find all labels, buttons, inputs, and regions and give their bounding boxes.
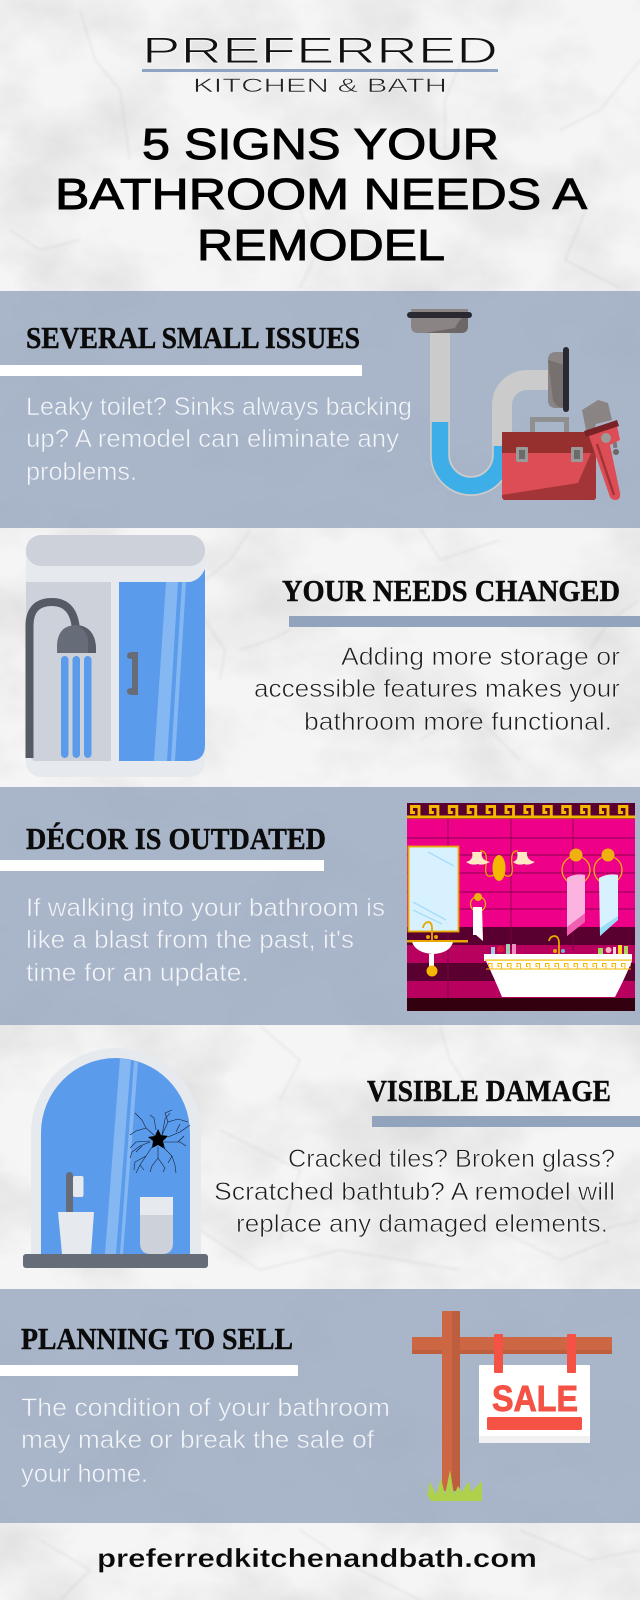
body text: The condition of your bathroom	[21, 1394, 390, 1422]
tile lines	[407, 819, 635, 927]
bottles	[491, 944, 628, 954]
top cap	[26, 535, 205, 566]
cabin frame	[26, 535, 205, 777]
icon: outdated bathroom scene	[407, 803, 635, 1011]
grass	[418, 1470, 482, 1501]
reflections	[105, 1058, 138, 1254]
body text: If walking into your bathroom is	[26, 894, 385, 922]
toolbox	[502, 432, 596, 500]
logo wordmark: PREFERRED	[142, 30, 498, 71]
body text: Scratched bathtub? A remodel will	[214, 1178, 615, 1206]
cup	[58, 1212, 94, 1254]
crossbar	[412, 1337, 612, 1354]
mirror	[408, 846, 458, 932]
blue towel	[599, 874, 618, 936]
heading: DÉCOR IS OUTDATED	[26, 821, 326, 856]
right drain	[548, 352, 565, 408]
door reflections	[154, 582, 186, 761]
glass	[41, 1058, 190, 1254]
sink faucet	[423, 922, 432, 940]
back panel	[26, 582, 111, 761]
body text: your home.	[21, 1460, 148, 1488]
shower pipe	[30, 602, 76, 758]
body text	[26, 894, 385, 987]
sign underline	[487, 1417, 582, 1430]
section 4 text	[214, 1073, 640, 1238]
door handle	[127, 652, 138, 695]
greek key frieze	[407, 803, 635, 819]
panel: planning to sell band	[0, 1289, 640, 1523]
title: REMODEL	[197, 221, 445, 270]
water streams	[61, 656, 92, 758]
title: 5 SIGNS YOUR	[142, 120, 499, 169]
left drain	[411, 309, 468, 333]
section 1 text	[0, 320, 412, 486]
icon: cracked window	[23, 1048, 208, 1268]
body text: accessible features makes your	[254, 675, 620, 703]
toothbrush	[66, 1172, 84, 1214]
body text	[21, 1394, 390, 1488]
tub faucet	[549, 936, 559, 954]
large towel rings	[470, 856, 622, 912]
wall	[407, 803, 635, 1011]
title: BATHROOM NEEDS A	[55, 170, 588, 219]
body text: up? A remodel can eliminate any	[26, 425, 400, 453]
body text	[254, 643, 620, 736]
sign straps	[494, 1334, 503, 1373]
section 5 text	[0, 1321, 390, 1488]
icon: shower cabin	[26, 535, 205, 777]
body text: may make or break the sale of	[21, 1426, 374, 1454]
panel: several small issues band	[0, 291, 640, 528]
body text: bathroom more functional.	[304, 708, 612, 736]
section 3 text	[0, 821, 385, 987]
pipe	[440, 333, 550, 486]
heading: PLANNING TO SELL	[21, 1321, 293, 1356]
heading: VISIBLE DAMAGE	[367, 1073, 611, 1108]
logo subline: KITCHEN & BATH	[193, 76, 447, 97]
title	[55, 120, 588, 270]
water glass	[140, 1197, 173, 1254]
icon: for sale sign	[412, 1311, 612, 1501]
body text: replace any damaged elements.	[236, 1210, 608, 1238]
heading: SEVERAL SMALL ISSUES	[26, 320, 360, 355]
wall sconce	[466, 851, 535, 881]
heading: YOUR NEEDS CHANGED	[282, 573, 620, 608]
section 2 text	[254, 573, 640, 736]
body text: Cracked tiles? Broken glass?	[288, 1145, 615, 1173]
heading bar	[0, 1365, 298, 1376]
water	[440, 422, 502, 486]
body text: problems.	[26, 458, 137, 486]
body text: Leaky toilet? Sinks always backing	[26, 393, 412, 421]
sign board	[479, 1365, 590, 1443]
body text: Adding more storage or	[341, 643, 620, 671]
heading bar	[0, 365, 362, 376]
crack	[130, 1110, 190, 1173]
body text: like a blast from the past, it's	[26, 926, 354, 954]
shower head	[57, 625, 96, 653]
window sill	[23, 1254, 208, 1268]
heading bar	[289, 616, 640, 627]
heading bar	[372, 1116, 640, 1127]
heading bar	[0, 860, 324, 871]
icon: plumbing trap and toolbox	[407, 309, 620, 500]
toolbox handle	[532, 420, 566, 434]
logo	[142, 30, 498, 97]
bathtub	[484, 954, 632, 961]
panel: decor band	[0, 787, 640, 1025]
sale label: SALE	[492, 1378, 578, 1419]
body text: time for an update.	[26, 959, 249, 987]
wrench	[582, 400, 612, 430]
white towel	[473, 907, 483, 941]
wainscot	[407, 927, 635, 945]
logo rule	[142, 69, 498, 72]
glass door	[119, 569, 205, 761]
post	[442, 1311, 460, 1491]
footer website: preferredkitchenandbath.com	[97, 1543, 537, 1573]
body text	[214, 1145, 615, 1238]
pink towel	[567, 874, 585, 936]
window frame	[31, 1048, 201, 1254]
sink	[407, 940, 468, 942]
body text	[26, 393, 412, 486]
